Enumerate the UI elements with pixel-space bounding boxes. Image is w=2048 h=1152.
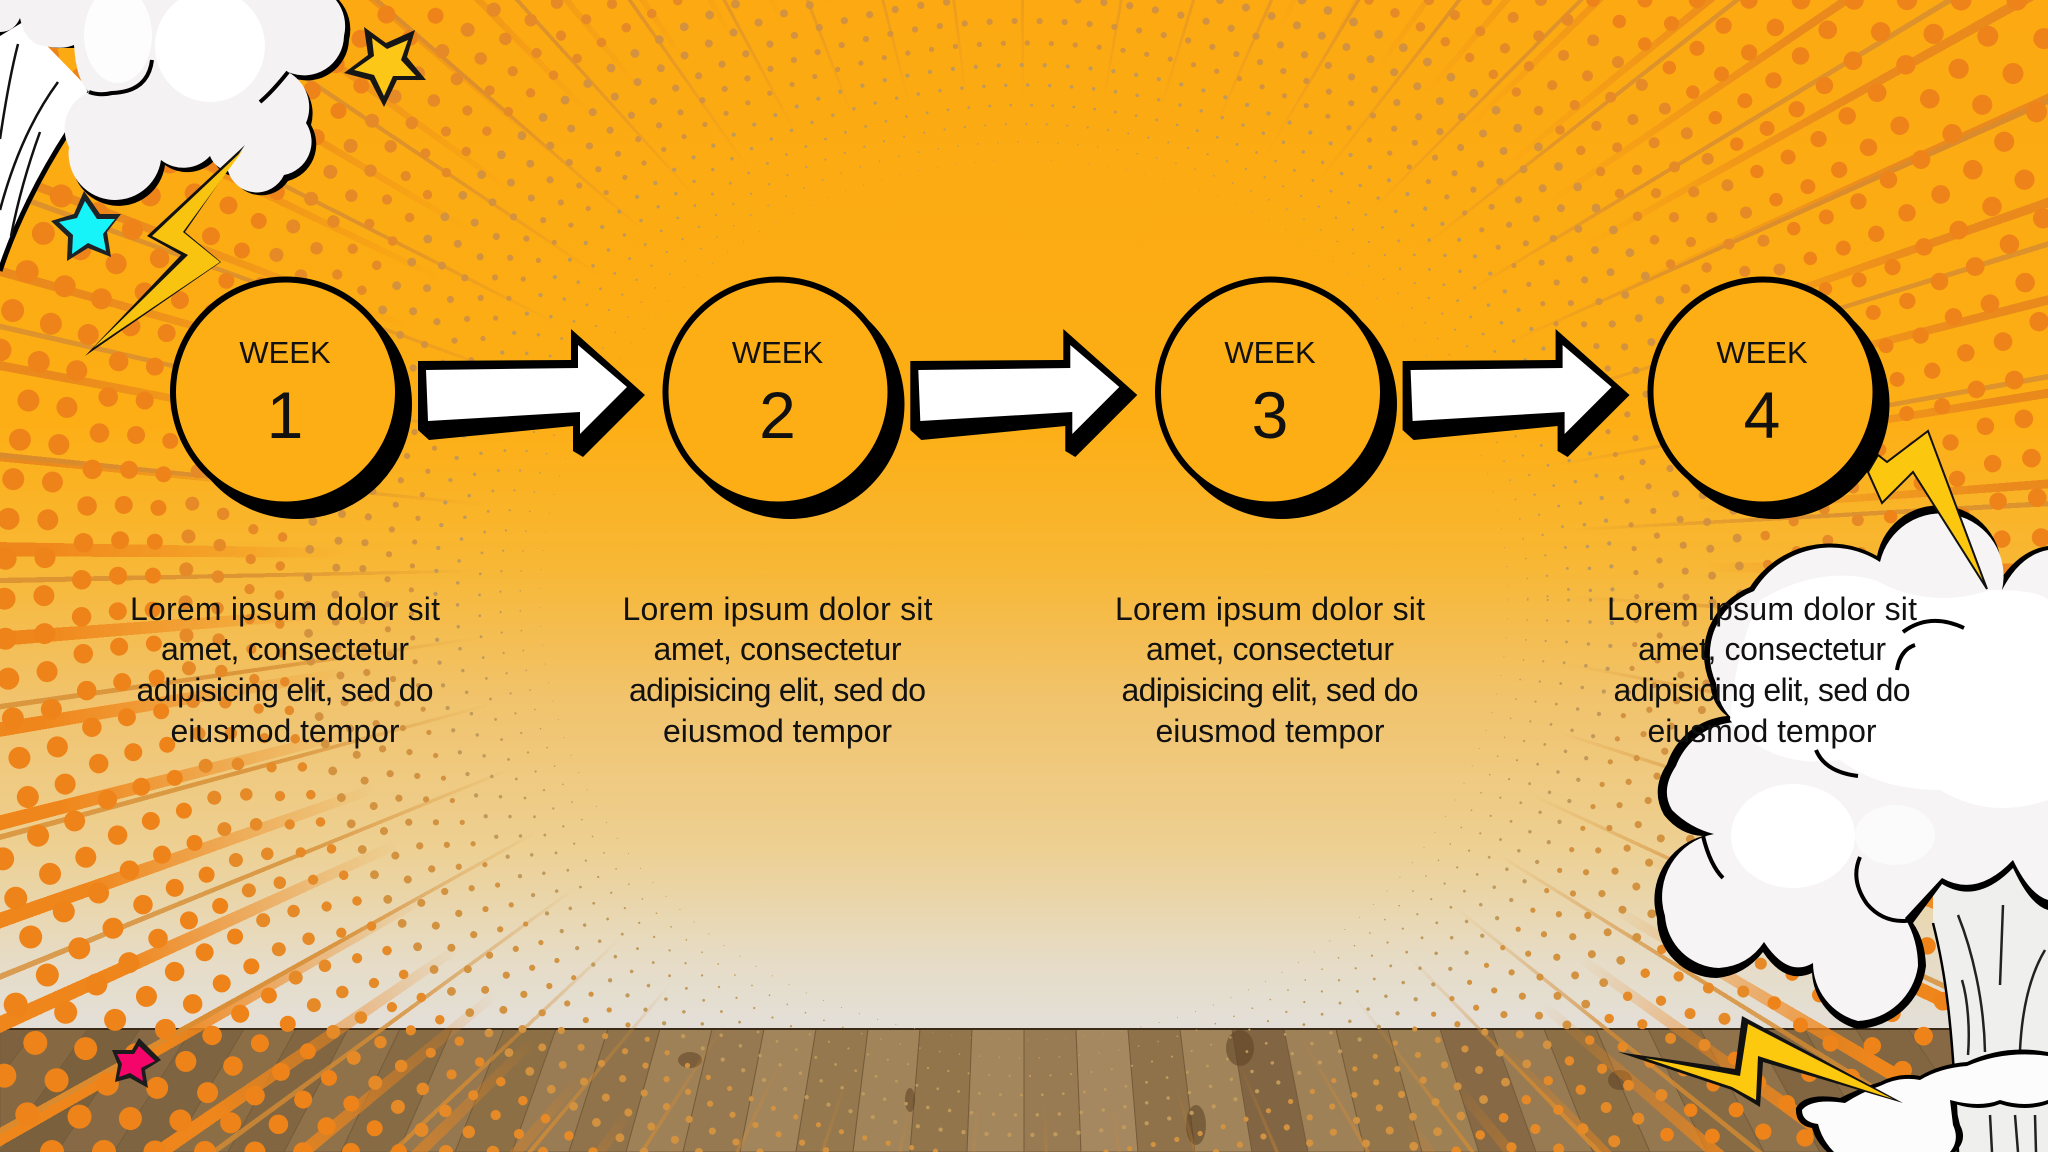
star: pink	[112, 1038, 161, 1088]
arrow 1 to 2	[418, 329, 645, 457]
lightning bolt: right	[1868, 431, 1987, 589]
text block: week 3: eiusmod tempor	[1156, 713, 1385, 749]
step 3: week 3	[1158, 280, 1397, 519]
step 1: week 1: WEEK	[239, 335, 331, 370]
text block: week 1: Lorem ipsum dolor sit	[130, 591, 440, 627]
text block: week 4: eiusmod tempor	[1648, 713, 1877, 749]
text block: week 1	[130, 591, 440, 749]
comic burst rays: upper half	[0, 0, 2048, 504]
step 3: week 3: WEEK	[1224, 335, 1316, 370]
text block: week 4: Lorem ipsum dolor sit	[1607, 591, 1917, 627]
step 4: week 4	[1650, 280, 1890, 519]
step 3: week 3: 3	[1252, 378, 1288, 452]
star: gold	[344, 27, 426, 107]
text block: week 3	[1115, 591, 1425, 749]
text block: week 2: eiusmod tempor	[663, 713, 892, 749]
text block: week 3: amet, consectetur	[1146, 631, 1394, 667]
comic burst rays: lower half	[0, 542, 2014, 1152]
step 4: week 4: WEEK	[1716, 335, 1808, 370]
text block: week 2: Lorem ipsum dolor sit	[622, 591, 933, 627]
explosion cloud: bottom right	[1796, 1050, 2048, 1152]
step 1: week 1: 1	[267, 378, 303, 452]
text block: week 2: amet, consectetur	[654, 631, 902, 667]
text block: week 3: adipisicing elit, sed do	[1122, 672, 1418, 708]
step 2: week 2: WEEK	[732, 335, 823, 370]
lightning bolt: bottom right	[1618, 1016, 1903, 1107]
step 1: week 1	[173, 280, 412, 519]
step 2: week 2	[666, 280, 904, 519]
step 4: week 4: 4	[1744, 378, 1780, 452]
explosion cloud: top left	[0, 0, 350, 271]
text block: week 3: Lorem ipsum dolor sit	[1115, 591, 1425, 627]
step 2: week 2: 2	[759, 378, 796, 452]
lightning bolt: top left	[85, 145, 245, 356]
text block: week 4: adipisicing elit, sed do	[1614, 672, 1910, 708]
explosion cloud: right	[1654, 505, 2048, 1152]
text block: week 4	[1607, 591, 1917, 749]
text block: week 2	[622, 591, 933, 749]
text block: week 2: adipisicing elit, sed do	[629, 672, 926, 708]
text block: week 1: eiusmod tempor	[170, 713, 400, 749]
text block: week 1: adipisicing elit, sed do	[136, 672, 434, 708]
text block: week 4: amet, consectetur	[1638, 631, 1886, 667]
star: cyan	[51, 191, 121, 261]
arrow 2 to 3	[910, 329, 1137, 457]
arrow 3 to 4	[1403, 329, 1630, 457]
text block: week 1: amet, consectetur	[161, 631, 409, 667]
